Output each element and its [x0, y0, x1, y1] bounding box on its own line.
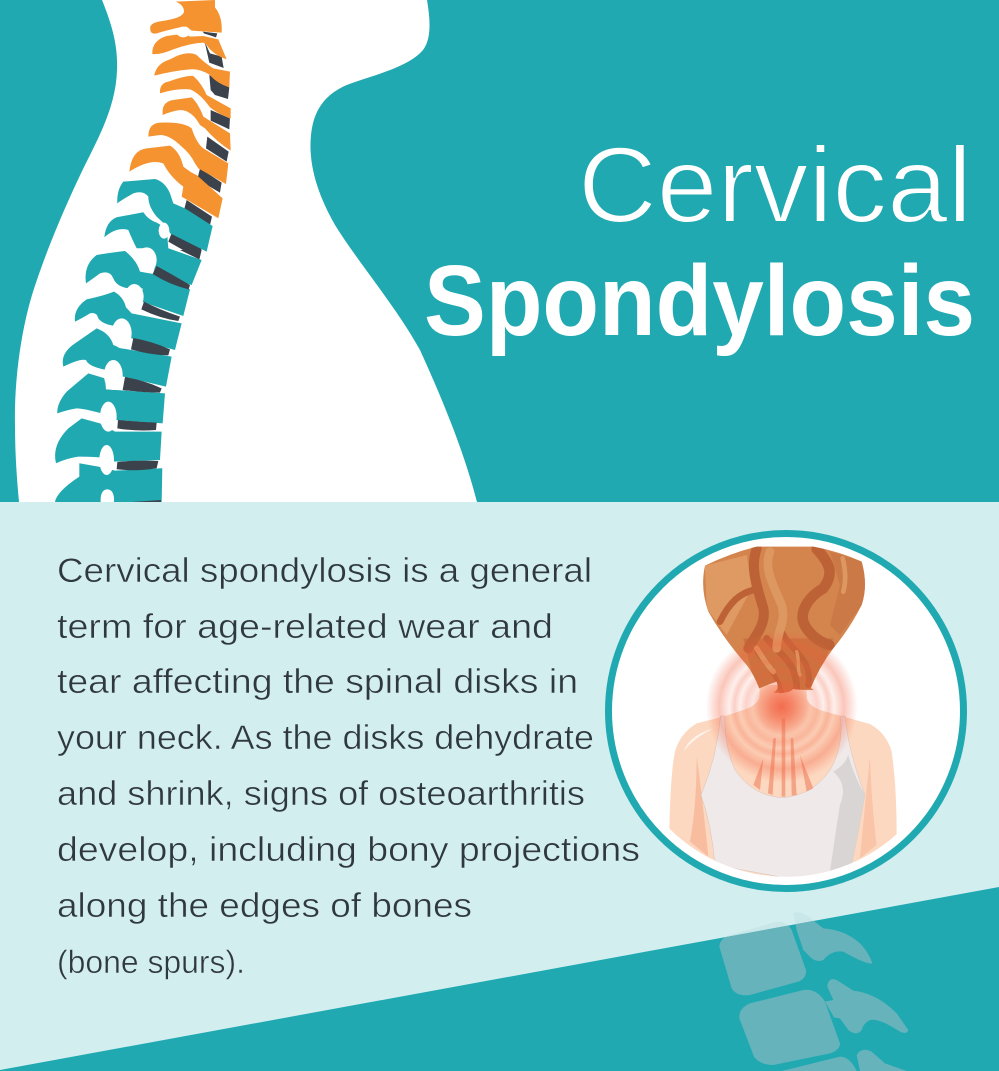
- illustration: white body silhouette: [15, 0, 477, 502]
- text block: description: Cervical spondylosis is a general: [57, 552, 592, 590]
- illustration: spine upper section: [104, 0, 231, 285]
- text block: description: (bone spurs).: [57, 944, 245, 980]
- text block: description: [57, 552, 640, 980]
- title: Cervical Spondylosis: [424, 124, 975, 357]
- tank top shadow: [830, 755, 865, 872]
- text block: description: develop, including bony projections: [57, 831, 640, 869]
- vertebrae: teal upper bones: [104, 179, 213, 285]
- text block: description: tear affecting the spinal disks in: [57, 663, 578, 701]
- text block: description: along the edges of bones: [57, 887, 472, 925]
- icon: faint vertebrae over the light panel: [719, 912, 908, 1071]
- icon: faint vertebrae watermark on the band: [719, 912, 908, 1071]
- discs: thoracic dark discs: [117, 250, 202, 502]
- vertebrae: teal thoracic bones: [55, 251, 190, 502]
- illustration: spine lower section: [55, 247, 202, 502]
- panel: light description background: [0, 502, 999, 1071]
- hair: dark right side: [830, 552, 867, 635]
- illustration: circular neck pain badge: [608, 534, 964, 888]
- background: teal header: [0, 0, 999, 502]
- panel: diagonal teal footer band: [0, 887, 999, 1071]
- hair: dark strands: [720, 548, 830, 692]
- title line: Cervical: Cervical: [578, 124, 972, 245]
- vertebrae: orange cervical bones: [129, 0, 231, 218]
- tank top: [701, 716, 865, 882]
- shading: arm creases: [690, 757, 708, 857]
- text block: description: your neck. As the disks dehydrate: [57, 719, 594, 757]
- hair: strands: [705, 548, 867, 692]
- pain glow rings: [706, 631, 858, 783]
- text block: description: and shrink, signs of osteoarthritis: [57, 775, 585, 813]
- text block: description: term for age-related wear and: [57, 608, 553, 646]
- hair: [703, 547, 867, 693]
- hair: light strands: [757, 552, 845, 675]
- skin: neck, shoulders and arms: [669, 685, 897, 878]
- discs: cervical dark discs: [168, 32, 230, 259]
- figure: woman seen from behind: [669, 547, 897, 882]
- hair: darker lower section: [743, 638, 833, 692]
- ring: teal circle with white fill: [608, 534, 964, 888]
- gaps: white foramen blobs: [99, 247, 157, 502]
- hair: lighter left side: [705, 555, 752, 635]
- spine stripes on upper back: [753, 718, 813, 797]
